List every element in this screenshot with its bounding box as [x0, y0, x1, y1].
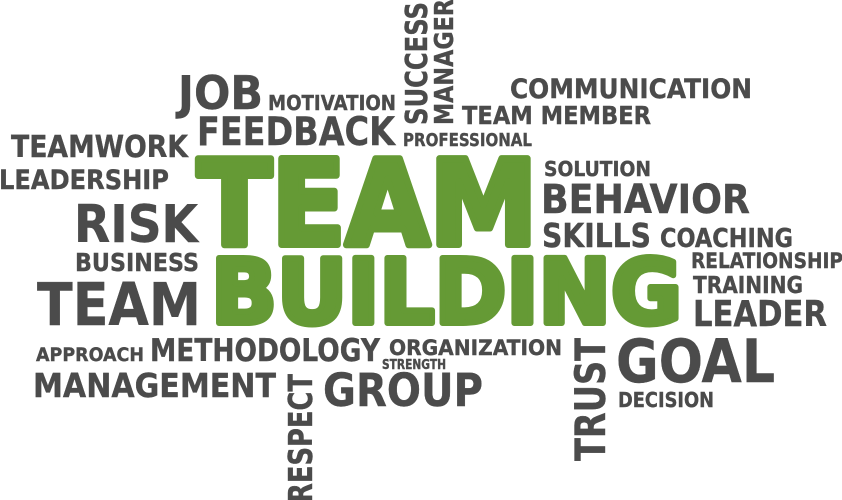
word: APPROACH: APPROACH: [36, 344, 144, 366]
word: JOB: JOB: [175, 66, 263, 120]
word: STRENGTH: STRENGTH: [382, 358, 446, 373]
word: TEAM (left): TEAM: [37, 270, 201, 339]
word: SOLUTION: SOLUTION: [544, 157, 651, 181]
word: MANAGEMENT: MANAGEMENT: [33, 366, 276, 405]
word: COMMUNICATION: COMMUNICATION: [510, 74, 752, 105]
word: RISK: RISK: [74, 195, 200, 255]
word: COACHING: COACHING: [660, 224, 793, 254]
word: MOTIVATION: MOTIVATION: [268, 91, 396, 115]
word: TEAMWORK: TEAMWORK: [11, 130, 190, 165]
word: SKILLS: SKILLS: [542, 216, 651, 255]
word: DECISION: DECISION: [618, 388, 714, 412]
word: GROUP: GROUP: [323, 364, 483, 417]
word: RESPECT: RESPECT: [281, 374, 320, 500]
word: TRAINING: TRAINING: [693, 273, 803, 299]
word: LEADERSHIP: LEADERSHIP: [0, 165, 169, 196]
word: METHODOLOGY: METHODOLOGY: [150, 333, 380, 369]
word: BUSINESS: BUSINESS: [75, 248, 199, 277]
word: TRUST: TRUST: [566, 338, 615, 461]
word: PROFESSIONAL: PROFESSIONAL: [403, 130, 532, 151]
title word: TEAM: TEAM: [198, 134, 538, 272]
word: FEEDBACK: FEEDBACK: [197, 110, 397, 155]
word: BEHAVIOR: BEHAVIOR: [541, 177, 750, 223]
word: GOAL: GOAL: [616, 327, 775, 397]
word: ORGANIZATION: ORGANIZATION: [389, 336, 562, 360]
title word: BUILDING: BUILDING: [211, 240, 682, 344]
word: TEAM MEMBER: TEAM MEMBER: [462, 101, 651, 130]
